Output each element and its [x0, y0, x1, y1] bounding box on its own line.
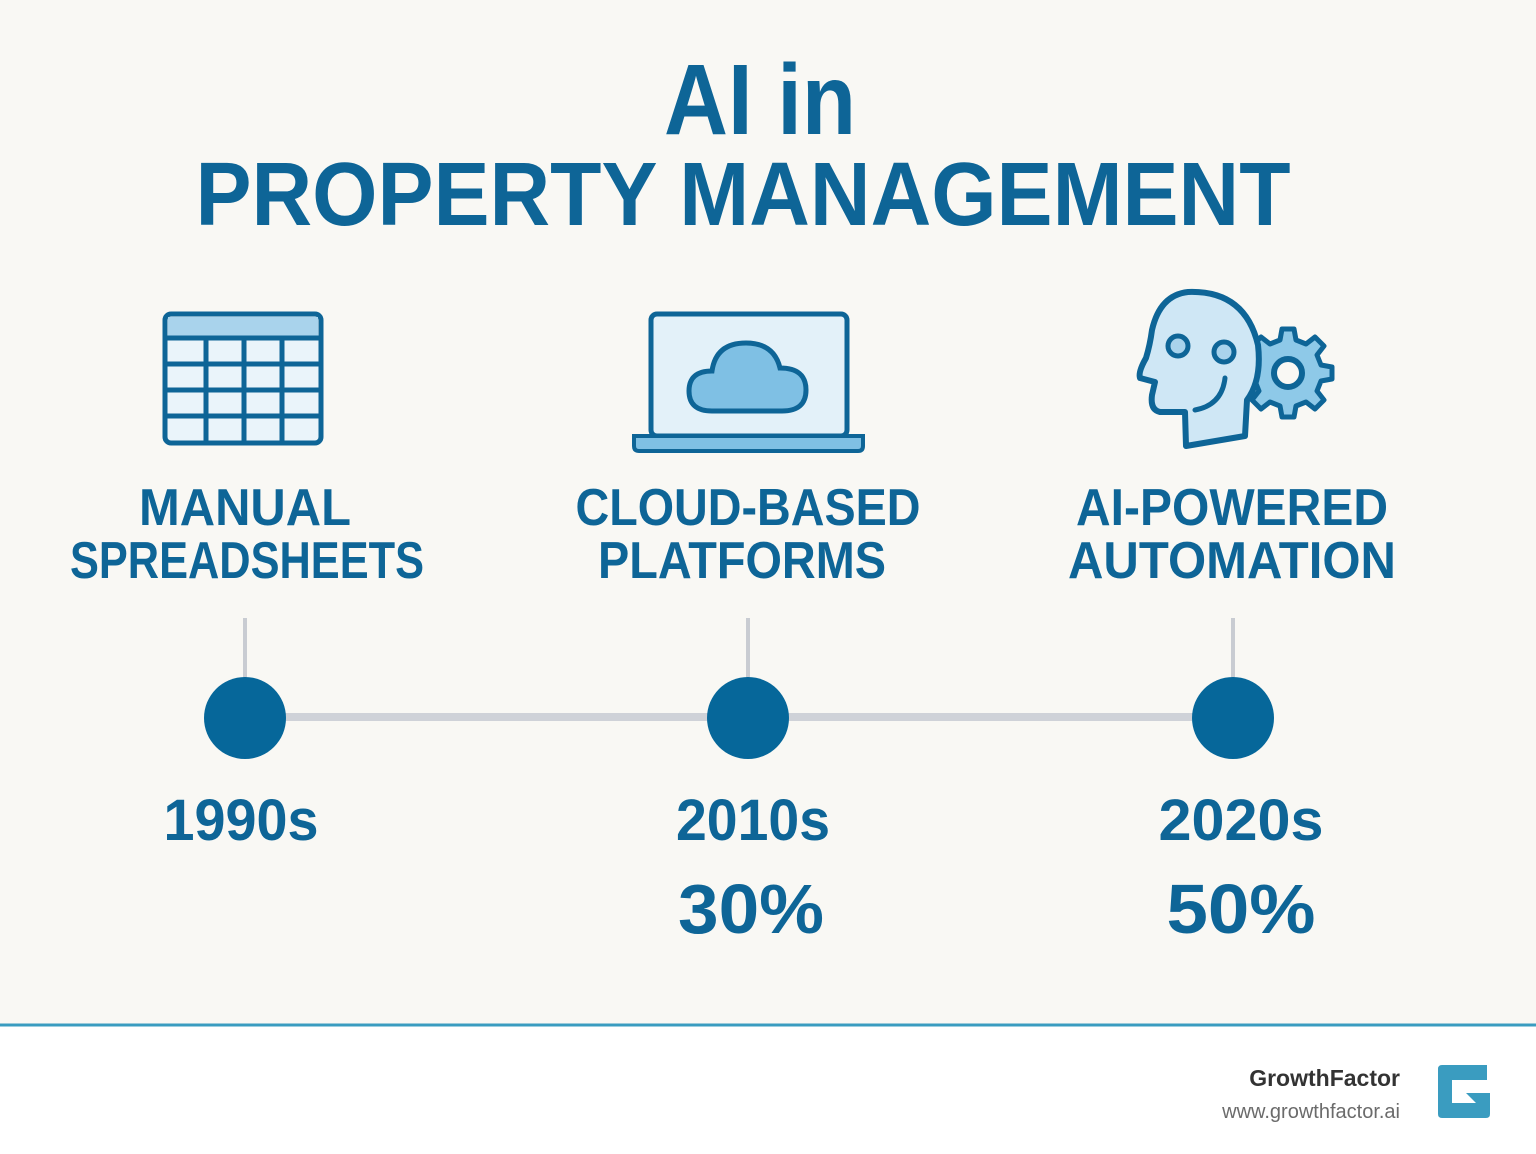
labels: AUTOMATION [1068, 532, 1396, 590]
title: AI in [664, 44, 856, 156]
footer: GrowthFactor [1249, 1065, 1400, 1091]
labels [70, 479, 1396, 590]
labels: CLOUD-BASED [576, 479, 920, 537]
years and percentages: 50% [1166, 870, 1316, 948]
years and percentages: 30% [678, 870, 824, 948]
years and percentages: 2020s [1158, 788, 1324, 853]
icon: AI head with gear [1140, 292, 1332, 446]
labels: PLATFORMS [598, 532, 886, 590]
labels: MANUAL [139, 479, 351, 537]
labels: SPREADSHEETS [70, 532, 424, 590]
icon: spreadsheet [165, 314, 321, 443]
years and percentages: 1990s [164, 788, 318, 853]
footer: www.growthfactor.ai [1221, 1101, 1400, 1123]
footer [0, 1025, 1536, 1154]
icon: logo [1438, 1065, 1490, 1118]
years and percentages [164, 788, 1324, 948]
icon: laptop with cloud [634, 314, 863, 451]
title: PROPERTY MANAGEMENT [196, 145, 1291, 245]
timeline [204, 618, 1274, 759]
labels: AI-POWERED [1076, 479, 1388, 537]
years and percentages: 2010s [676, 788, 830, 853]
title [196, 44, 1291, 245]
